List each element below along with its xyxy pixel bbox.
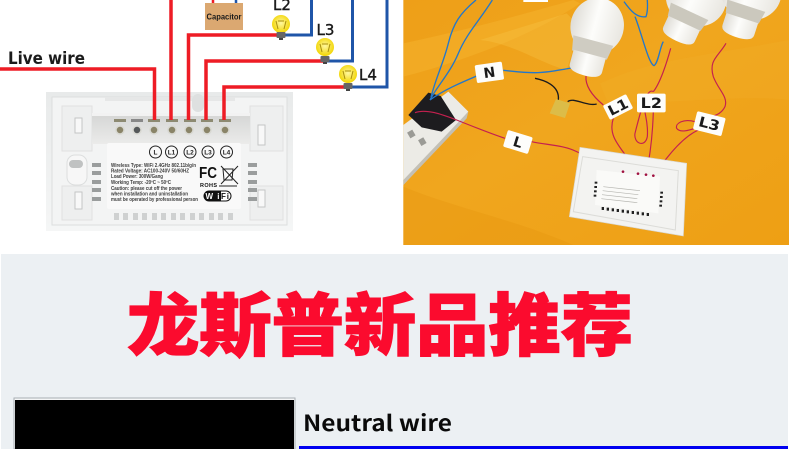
terminals (114, 119, 231, 122)
switch spec label (107, 143, 241, 209)
panel: product recommendation (1, 254, 788, 449)
WiFi logo (204, 191, 231, 201)
specification text: when installation and uninstallation (110, 192, 188, 198)
switch spec label: L1 (168, 150, 176, 156)
specification text: Load Power: 300W/Gang (111, 174, 163, 180)
live wire label: Live wire (8, 49, 85, 69)
panel: wiring diagram (0, 0, 387, 231)
capacitor photo (535, 78, 597, 118)
tag L3 (693, 111, 726, 136)
neutral wire label: Neutral wire (303, 406, 452, 438)
switch spec label: L (154, 150, 158, 156)
tag N (475, 62, 504, 83)
tag L1: L1 (606, 96, 631, 120)
tag L2 (637, 94, 666, 112)
capacitor (205, 3, 243, 30)
tag L1 (603, 94, 634, 121)
specification text: Caution: please cut off the power (111, 186, 182, 192)
tag L: L (511, 134, 524, 152)
specification text: must be operated by professional person (111, 197, 198, 203)
bulb L3: L3 (316, 21, 334, 39)
light bulb 1 (558, 0, 630, 82)
switch spec label: L2 (186, 150, 194, 156)
black image box (14, 398, 295, 449)
partial tag at top (523, 0, 548, 2)
terminal markings (150, 146, 232, 158)
light bulb 3 (707, 0, 789, 47)
switch back plate (46, 92, 293, 231)
tag L (503, 130, 533, 154)
wire tags (475, 62, 726, 154)
orange cloth (403, 0, 789, 245)
ROHS mark: ROHS (200, 183, 217, 189)
switch spec label: L3 (204, 150, 212, 156)
blue neutral line (299, 446, 788, 449)
switch photo (569, 147, 687, 236)
icon: crossed-out bin (219, 166, 238, 186)
vents (92, 163, 257, 201)
bulb L2 (272, 0, 291, 40)
blue wires (430, 0, 663, 100)
panel: wiring photo (403, 0, 789, 245)
tag L2: L2 (641, 96, 662, 112)
title: 龙斯普新品推荐 (127, 289, 633, 365)
capacitor: Capacitor (206, 12, 242, 22)
screws (116, 126, 229, 134)
bulb L4: L4 (359, 66, 377, 84)
blue neutral wires (236, 0, 387, 87)
pink live wires (415, 43, 726, 177)
FC mark: FC (199, 165, 217, 182)
specification text: Rated Voltage: AC100-240V 50/60HZ (111, 168, 189, 174)
switch spec label: L4 (223, 150, 231, 156)
WiFi logo: Wi (206, 192, 220, 201)
bulb L3 (316, 21, 334, 64)
specification text (110, 163, 198, 203)
red live wires (0, 0, 347, 120)
power strip (403, 92, 468, 185)
bulb L4 (339, 65, 377, 91)
specification text: Wireless Type: WiFi 2.4GHz 802.11b/g/n (111, 163, 196, 169)
tag L3: L3 (697, 114, 721, 135)
WiFi logo: Fi (221, 192, 229, 201)
tag N: N (483, 65, 496, 82)
light bulb 2 (648, 0, 736, 54)
specification text: Working Temp: -20ºC ~ 50ºC (111, 180, 171, 186)
